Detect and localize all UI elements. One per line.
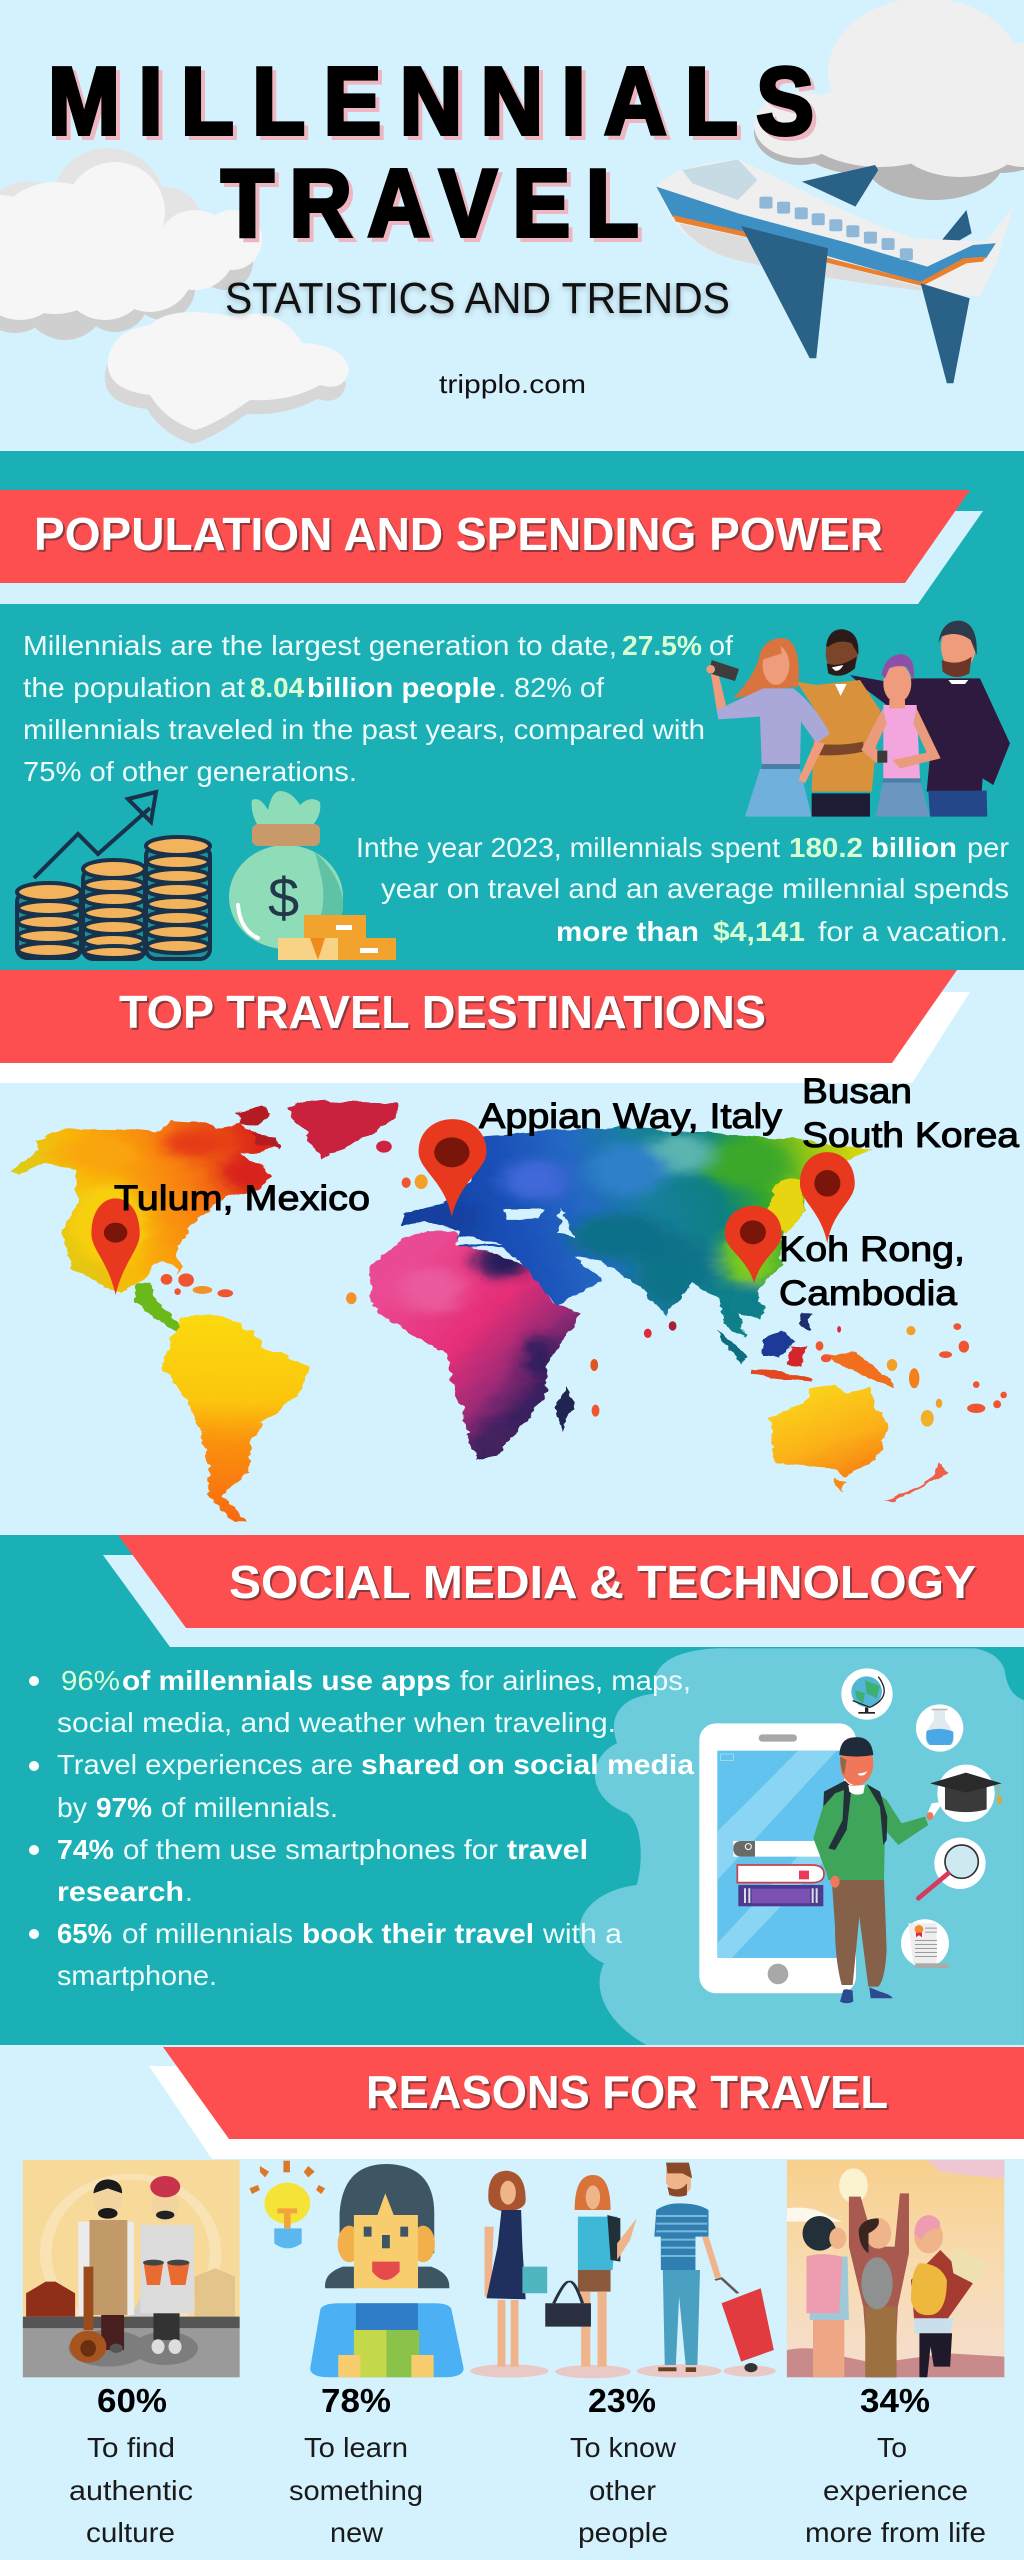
text block: population: millennials traveled in the past years, compared with [23, 714, 705, 745]
illustration: money bag with gold bars: $ [268, 866, 299, 929]
bullet list: social media statistics: of millennials [122, 1918, 293, 1949]
statistic: 34%: To [877, 2432, 907, 2463]
banner: population and spending power: POPULATION AND SPENDING POWER [34, 508, 883, 560]
title [48, 48, 814, 257]
text block: spending: $4,141 [713, 916, 805, 947]
bullet list: social media statistics: of them use smartphones for [123, 1834, 498, 1865]
bullet list: social media statistics: for airlines, maps, [460, 1665, 691, 1696]
text block: population: 75% of other generations. [23, 756, 357, 787]
statistic: 60%: authentic [69, 2475, 193, 2506]
text block: population: 8.04 [250, 672, 304, 703]
statistic: 23% [570, 2382, 677, 2548]
blob corner [965, 1647, 1024, 1700]
bullet list: social media statistics: 74% [57, 1834, 114, 1865]
illustration: phone and student with icons [699, 1668, 1002, 2003]
text block: population: billion people [307, 672, 496, 703]
statistic: 60%: culture [86, 2517, 175, 2548]
map label: Tulum: Tulum, Mexico [114, 1179, 370, 1218]
map label: Busan: Busan [802, 1072, 912, 1111]
bullet list: social media statistics: Travel experiences are [57, 1749, 353, 1780]
bullet list: social media statistics: . [185, 1876, 193, 1907]
bullet list: social media statistics: social media, and weather when traveling. [57, 1707, 616, 1738]
text block: spending: for a vacation. [818, 916, 1008, 947]
banner: social media and technology [103, 1535, 1024, 1647]
website: tripplo.com [439, 369, 586, 399]
bullet list: social media statistics [29, 1665, 694, 1991]
banner: top travel destinations: TOP TRAVEL DESTINATIONS [119, 986, 766, 1038]
image card: experience more from life [787, 2160, 1004, 2377]
cloud: top right [754, 0, 1024, 200]
text block: spending: year on travel and an average millennial spends [381, 873, 1009, 904]
map label: Koh Rong: Cambodia [779, 1274, 958, 1313]
text block: spending: Inthe year 2023, millennials spent [356, 832, 780, 863]
location pin: Appian Way [419, 1119, 486, 1217]
text block: population: Millennials are the largest generation to date, [23, 630, 617, 661]
bullet list: social media statistics: of millennials. [161, 1792, 338, 1823]
text block: population: 27.5% [622, 630, 702, 661]
statistic: 60% [69, 2382, 193, 2548]
statistic: 34%: 34% [860, 2382, 930, 2419]
teal background: social section [0, 1535, 1024, 2045]
banner: reasons for travel [149, 2047, 1024, 2159]
text block: spending: 180.2 [789, 832, 863, 863]
blue blob background [579, 1648, 1024, 2045]
text block: population: . 82% of [498, 672, 604, 703]
statistic: 78% [289, 2382, 423, 2548]
bullet list: social media statistics: research [57, 1876, 184, 1907]
teal background: population section [0, 451, 1024, 970]
banner: reasons for travel: REASONS FOR TRAVEL [366, 2066, 888, 2118]
text block: population: of [709, 630, 733, 661]
map label: Busan [802, 1072, 1020, 1155]
location pin: Busan [800, 1152, 855, 1243]
text block: population: the population at [23, 672, 245, 703]
statistic: 60%: 60% [97, 2382, 167, 2419]
bullet list: social media statistics: with a [542, 1918, 622, 1949]
text block: spending [356, 832, 1009, 947]
illustration: four friends taking a selfie [706, 621, 1010, 817]
airplane illustration [656, 159, 1013, 383]
illustration: learning girl with light bulb [249, 2161, 464, 2377]
cloud: left [0, 148, 262, 340]
statistic: 34%: more from life [805, 2517, 986, 2548]
illustration: three travellers [470, 2163, 776, 2378]
location pin: Koh Rong [725, 1206, 782, 1283]
cloud: lower [105, 312, 349, 444]
statistic: 34% [805, 2382, 986, 2548]
title: TRAVEL [221, 150, 639, 257]
bullet list: social media statistics: 65% [57, 1918, 112, 1949]
text block: population [23, 630, 733, 787]
bullet list: social media statistics: smartphone. [57, 1960, 217, 1991]
map label: Koh Rong: Koh Rong, [779, 1230, 965, 1269]
statistic: 34%: experience [823, 2475, 968, 2506]
subtitle: STATISTICS AND TRENDS [225, 274, 730, 323]
map label: Koh Rong [779, 1230, 965, 1313]
statistic: 23%: other [589, 2475, 656, 2506]
statistic: 78%: new [330, 2517, 384, 2548]
world map [10, 1100, 1007, 1523]
statistic: 23%: To know [570, 2432, 677, 2463]
illustration: rising coin stacks [17, 792, 210, 959]
text block: spending: billion [871, 832, 957, 863]
bullet list: social media statistics: of millennials use apps [122, 1665, 451, 1696]
text block: spending: more than [556, 916, 699, 947]
bullet list: social media statistics: by [57, 1792, 87, 1823]
bullet list: social media statistics: travel [507, 1834, 588, 1865]
image card: authentic culture [23, 2160, 240, 2377]
banner: social media and technology: SOCIAL MEDIA & TECHNOLOGY [229, 1556, 976, 1608]
statistic: 78%: 78% [321, 2382, 391, 2419]
statistic: 78%: To learn [304, 2432, 408, 2463]
statistic: 60%: To find [87, 2432, 175, 2463]
title: MILLENNIALS [48, 48, 814, 155]
statistic: 78%: something [289, 2475, 423, 2506]
text block: spending: per [967, 832, 1009, 863]
bullet list: social media statistics: book their travel [302, 1918, 534, 1949]
statistic: 23%: people [578, 2517, 668, 2548]
banner: population and spending power [0, 490, 983, 604]
bullet list: social media statistics: 97% [96, 1792, 152, 1823]
bullet list: social media statistics: 96% [61, 1665, 120, 1696]
location pin: Tulum [91, 1198, 140, 1295]
statistic: 23%: 23% [588, 2382, 656, 2419]
bullet list: social media statistics: shared on social media [361, 1749, 694, 1780]
map label: Busan: South Korea [802, 1116, 1020, 1155]
illustration: money bag with gold bars [229, 791, 396, 960]
banner: top travel destinations [0, 970, 970, 1083]
map label: Appian Way: Appian Way, Italy [479, 1097, 783, 1136]
